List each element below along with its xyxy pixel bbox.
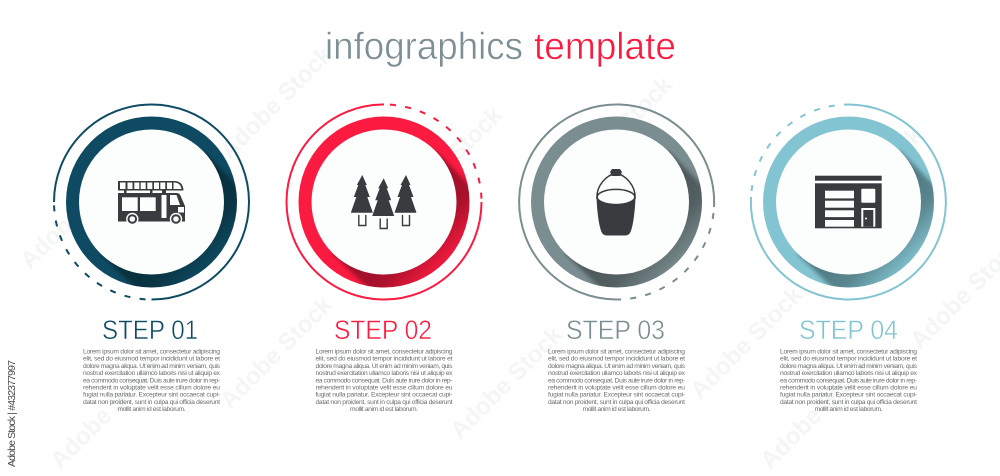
title bbox=[325, 26, 676, 68]
watermark: Adobe Stock bbox=[45, 351, 168, 474]
text block: step 02: fugiat nulla pariatur. Excepteur sint occaecat cupi- bbox=[316, 392, 452, 399]
watermark: Adobe Stock bbox=[215, 291, 338, 414]
text block: step 02: dolore magna aliqua. Ut enim ad minim veniam, quis bbox=[316, 363, 453, 370]
ring: red bbox=[298, 116, 470, 288]
text block: step 02: rehenderit in voluptate velit esse cillum dolore eu bbox=[316, 384, 453, 392]
text block: step 03: rehenderit in voluptate velit esse cillum dolore eu bbox=[548, 384, 685, 392]
text block: step 03: ea commodo consequat. Duis aute irure dolor in rep- bbox=[548, 377, 685, 384]
text block: step 02: elit, sed do eiusmod tempor incididunt ut labore et bbox=[316, 356, 453, 363]
text block: step 01: ea commodo consequat. Duis aute irure dolor in rep- bbox=[83, 377, 220, 384]
text block: step 01: fugiat nulla pariatur. Excepteur sint occaecat cupi- bbox=[83, 392, 220, 399]
ring: light blue bbox=[763, 116, 934, 288]
text block: step 01: mollit anim id est laborum. bbox=[118, 406, 186, 413]
text block: step 03: fugiat nulla pariatur. Excepteur sint occaecat cupi- bbox=[548, 392, 685, 399]
text block: step 03: dolore magna aliqua. Ut enim ad minim veniam, quis bbox=[548, 363, 686, 370]
white disc bbox=[544, 130, 689, 274]
white disc bbox=[776, 130, 921, 274]
watermark: Adobe Stock bbox=[445, 321, 568, 444]
watermark: Adobe Stock bbox=[385, 101, 508, 224]
panel: step 02 bbox=[287, 104, 499, 413]
ring shadow bbox=[331, 149, 470, 288]
text block: step 01 bbox=[83, 348, 221, 413]
text block: step 01: elit, sed do eiusmod tempor incididunt ut labore et bbox=[83, 356, 220, 363]
text block: step 03: nostrud exercitation ullamco laboris nisi ut aliquip ex bbox=[548, 370, 686, 377]
ring: teal bbox=[66, 116, 237, 288]
outer arc, solid and dashed bbox=[751, 104, 946, 299]
text block: step 04: fugiat nulla pariatur. Excepteur sint occaecat cupi- bbox=[780, 392, 917, 399]
text block: step 03: elit, sed do eiusmod tempor incididunt ut labore et bbox=[548, 356, 685, 363]
text block: step 01: datat non proident, sunt in culpa qui officia deserunt bbox=[83, 399, 220, 406]
panel: step 04 bbox=[751, 104, 963, 413]
text block: step 03 bbox=[548, 348, 686, 413]
text block: step 01: Lorem ipsum dolor sit amet, consectetur adipiscing bbox=[83, 348, 220, 356]
outer arc, solid and dashed bbox=[54, 105, 249, 300]
title: infographics bbox=[325, 26, 523, 68]
text block: step 02: Lorem ipsum dolor sit amet, consectetur adipiscing bbox=[316, 348, 453, 356]
text block: step 01: nostrud exercitation ullamco laboris nisi ut aliquip ex bbox=[83, 370, 221, 377]
watermark: Adobe Stock bbox=[805, 121, 928, 244]
text block: step 02: mollit anim id est laborum. bbox=[350, 406, 418, 413]
text block: step 04: dolore magna aliqua. Ut enim ad minim veniam, quis bbox=[780, 363, 918, 370]
icon: pine trees bbox=[351, 175, 416, 228]
text block: step 04: rehenderit in voluptate velit esse cillum dolore eu bbox=[780, 384, 917, 392]
ring: grey bbox=[531, 116, 702, 288]
text block: step 04: datat non proident, sunt in culpa qui officia deserunt bbox=[780, 399, 917, 406]
watermark: Adobe Stock bbox=[215, 41, 338, 164]
watermark: Adobe Stock bbox=[555, 71, 678, 194]
title: template bbox=[534, 26, 676, 68]
text block: step 04: ea commodo consequat. Duis aute irure dolor in rep- bbox=[780, 377, 917, 384]
text block: step 03: Lorem ipsum dolor sit amet, consectetur adipiscing bbox=[548, 348, 685, 356]
text block: step 04: mollit anim id est laborum. bbox=[814, 406, 883, 413]
text block: step 03: mollit anim id est laborum. bbox=[582, 406, 651, 413]
outer arc, solid and dashed bbox=[519, 105, 714, 300]
white disc bbox=[79, 130, 224, 274]
ring shadow bbox=[100, 150, 237, 288]
heading: step 03: STEP 03 bbox=[566, 315, 665, 345]
icon: fire truck bbox=[118, 181, 185, 225]
text block: step 04: nostrud exercitation ullamco laboris nisi ut aliquip ex bbox=[780, 370, 918, 377]
icon: garage bbox=[815, 176, 882, 228]
outer arc, solid and dashed bbox=[287, 104, 482, 300]
text block: step 01: dolore magna aliqua. Ut enim ad minim veniam, quis bbox=[83, 363, 221, 370]
text block: step 02: ea commodo consequat. Duis aute irure dolor in rep- bbox=[316, 377, 452, 384]
text block: step 04: elit, sed do eiusmod tempor incididunt ut labore et bbox=[780, 356, 917, 363]
heading: step 01: STEP 01 bbox=[102, 315, 198, 345]
icon: bucket bbox=[596, 169, 636, 236]
white disc bbox=[312, 130, 456, 274]
text block: step 02: datat non proident, sunt in culpa qui officia deserunt bbox=[316, 399, 453, 406]
text block: step 04 bbox=[780, 348, 918, 413]
panel: step 01 bbox=[54, 105, 266, 413]
watermark: Adobe Stock bbox=[755, 351, 878, 474]
text block: step 04: Lorem ipsum dolor sit amet, consectetur adipiscing bbox=[780, 348, 917, 356]
ring shadow bbox=[796, 149, 934, 288]
ring shadow bbox=[564, 150, 702, 288]
watermark: Adobe Stock bbox=[685, 281, 808, 404]
panel: step 03 bbox=[519, 105, 731, 413]
text block: step 01: rehenderit in voluptate velit esse cillum dolore eu bbox=[83, 384, 220, 392]
text block: step 02 bbox=[316, 348, 453, 413]
watermark: Adobe Stock bbox=[15, 151, 138, 274]
heading: step 02: STEP 02 bbox=[334, 315, 432, 345]
heading: step 04: STEP 04 bbox=[799, 315, 898, 345]
text block: step 02: nostrud exercitation ullamco laboris nisi ut aliquip ex bbox=[316, 370, 453, 377]
text block: step 03: datat non proident, sunt in culpa qui officia deserunt bbox=[548, 399, 685, 406]
side credit: Adobe Stock | #432377997 bbox=[6, 360, 18, 467]
